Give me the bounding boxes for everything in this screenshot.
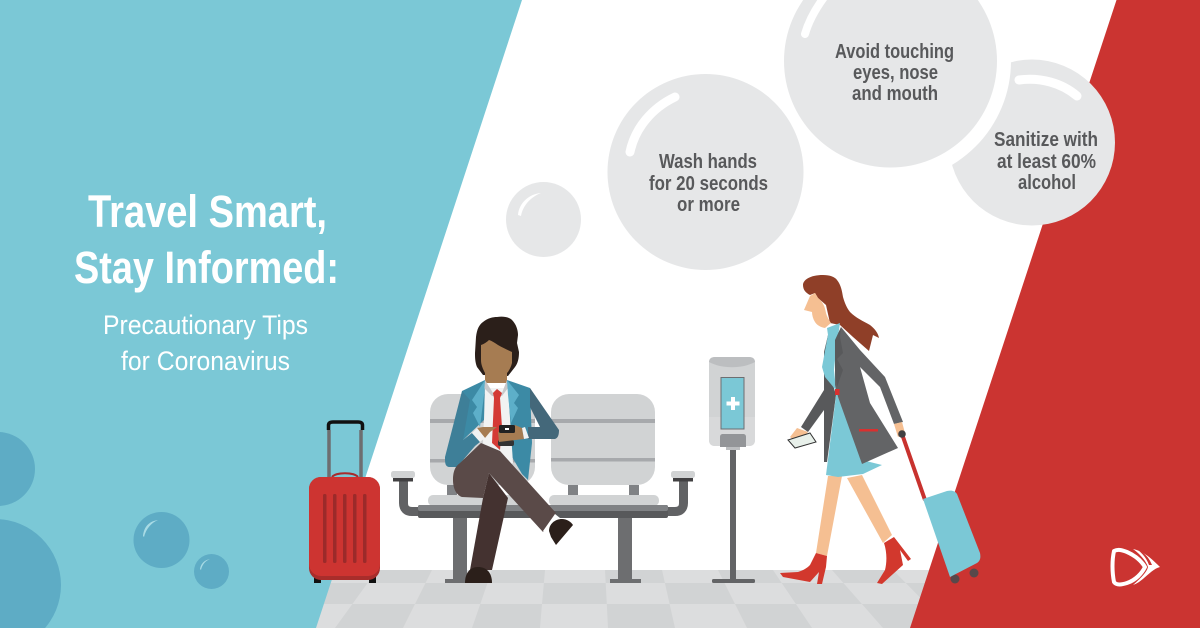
- red suitcase: [309, 422, 380, 583]
- man: cuffs: [472, 427, 529, 442]
- man: far arm: [528, 388, 559, 439]
- woman: suitcase handle: [902, 434, 925, 500]
- title: Stay Informed:: [74, 242, 339, 293]
- decorative blue bubbles: [0, 432, 229, 628]
- bubble: avoid touching: eyes, nose: [853, 62, 938, 84]
- woman: hair: [803, 275, 879, 351]
- subtitle: Precautionary Tips: [103, 310, 308, 340]
- bubble: wash hands: for 20 seconds: [649, 173, 768, 195]
- bubble: small empty: [506, 182, 581, 257]
- woman: belt: [835, 389, 840, 395]
- checkered floor: [290, 570, 960, 628]
- woman: grip: [898, 430, 906, 438]
- man: hair: [475, 317, 519, 376]
- seated man: [445, 317, 573, 583]
- woman: near arm: [801, 390, 824, 432]
- woman: coat: [835, 327, 903, 464]
- man: planted shoe: [465, 567, 492, 583]
- man: lower leg: [470, 473, 508, 570]
- man: raised shoe: [549, 519, 573, 545]
- bubble: avoid touching: [784, 0, 997, 168]
- bubble: sanitize: alcohol: [1018, 172, 1076, 194]
- airport bench: [391, 394, 695, 583]
- bubble: sanitize: [769, 0, 1115, 226]
- title: Travel Smart,: [88, 186, 327, 237]
- woman: hands: [790, 422, 905, 443]
- woman: wheels: [950, 568, 978, 584]
- woman: coat pocket: [859, 429, 878, 432]
- man: sock: [543, 514, 560, 534]
- bubble: wash hands: Wash hands: [659, 151, 757, 173]
- man: lapels: [472, 380, 519, 427]
- subtitle: for Coronavirus: [121, 346, 290, 376]
- man: collar: [484, 380, 508, 396]
- woman: lapel shade: [835, 327, 843, 387]
- woman: legs: [816, 475, 892, 556]
- man: jacket left panel: [462, 380, 485, 440]
- bubble: wash hands: or more: [677, 194, 740, 216]
- sanitizer dispenser: [709, 357, 755, 583]
- woman: dress: [822, 323, 882, 477]
- man: face and neck: [481, 340, 512, 383]
- panel: red right background: [910, 0, 1200, 628]
- bubble: avoid touching: Avoid touching: [835, 41, 954, 63]
- bubble: wash hands: [608, 74, 804, 270]
- bubble: avoid touching: and mouth: [852, 83, 938, 105]
- walking woman with suitcase: [780, 275, 980, 584]
- woman: phone: [788, 433, 816, 448]
- man: tie: [492, 389, 502, 450]
- title: [74, 186, 339, 293]
- man: shirt: [483, 388, 513, 470]
- man: jacket right panel: [505, 380, 532, 480]
- bubble: sanitize: at least 60%: [997, 151, 1096, 173]
- panel: blue left background: [0, 0, 522, 628]
- woman: coat back panel: [824, 335, 836, 462]
- woman: suitcase: [923, 491, 980, 577]
- man: hands: [477, 425, 524, 442]
- subtitle: [103, 310, 308, 376]
- bubble: sanitize: Sanitize with: [994, 129, 1098, 151]
- logo: [1112, 549, 1160, 585]
- man: watch strap: [498, 440, 514, 446]
- man: phone: [499, 425, 515, 433]
- man: thigh: [453, 443, 556, 532]
- woman: face: [804, 293, 831, 328]
- man: near arm: [445, 391, 480, 467]
- woman: shoes: [780, 537, 911, 584]
